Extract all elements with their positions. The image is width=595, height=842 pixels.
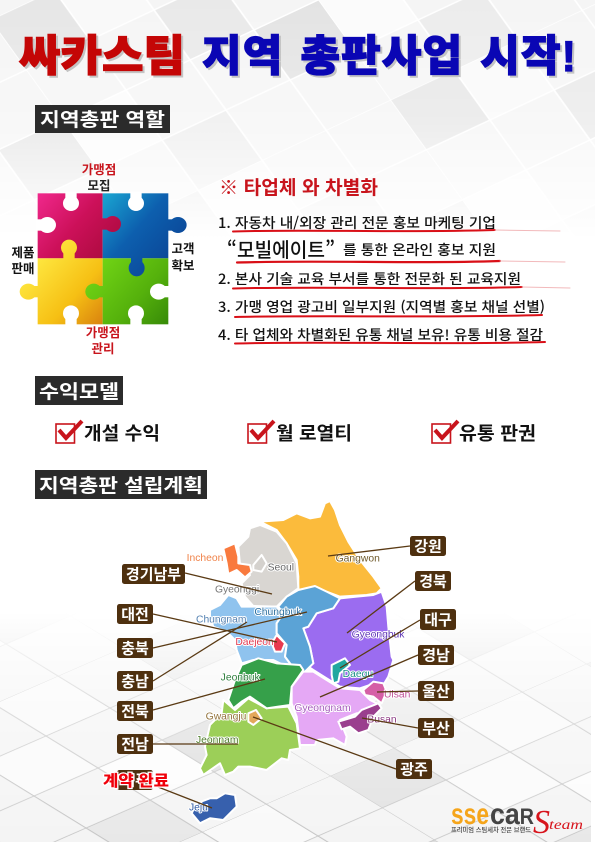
heading: 지역총판 설립계획: 지역총판 설립계획	[39, 471, 203, 498]
logo: ssecar Steam: caR	[490, 798, 534, 831]
region: Gyeongbuk	[303, 592, 393, 688]
name: Busan: Busan	[367, 715, 397, 726]
blue tabs	[167, 219, 175, 231]
logo: ssecar Steam	[451, 798, 583, 841]
name: Ulsan: Ulsan	[384, 689, 411, 700]
puzzle diagram	[20, 192, 187, 326]
puzzle label: 제품 판매: 제품	[11, 242, 35, 261]
tag: 대구: 대구	[424, 609, 452, 630]
logo: ssecar Steam: S	[533, 804, 550, 841]
name: Gyeongbuk: Gyeongbuk	[352, 630, 405, 641]
region: Gwangju	[248, 710, 262, 725]
tag: 전북: 전북	[121, 700, 149, 722]
tag: 울산: 울산	[422, 680, 450, 702]
name: Gyeongnam: Gyeongnam	[294, 703, 351, 714]
leader lines	[153, 546, 420, 808]
item 2: 2. 본사 기술 교육 부서를 통한 전문화 된 교육지원	[218, 269, 521, 289]
region: Jeonbuk	[228, 658, 303, 708]
red brush underlines	[233, 230, 570, 344]
item 1 continued	[227, 234, 496, 263]
name: Gyeonggi: Gyeonggi	[215, 584, 259, 595]
puzzle label: 가맹점 관리: 관리	[91, 338, 115, 357]
name: Jeju: Jeju	[189, 803, 208, 814]
logo: ssecar Steam: 프리미엄 스팀세차 전문 브랜드	[451, 824, 531, 834]
region: Chungbuk	[277, 586, 340, 673]
puzzle label: 가맹점 관리: 가맹점	[86, 322, 120, 341]
logo: ssecar Steam: sse	[451, 798, 489, 831]
title: 지역 총판사업 시작!	[204, 35, 578, 83]
name: Daegu: Daegu	[343, 669, 373, 680]
map of South Korea	[187, 501, 411, 823]
region: Busan	[338, 703, 382, 733]
revenue item: 유통 판권: 유통 판권	[459, 420, 536, 446]
tag: 경북: 경북	[419, 570, 447, 592]
item 4: 4. 타 업체와 차별화된 유통 채널 보유! 유통 비용 절감	[218, 325, 543, 345]
item 1: 1. 자동차 내/외장 관리 전문 홍보 마케팅 기업	[218, 213, 496, 233]
tag: 제주 with contract complete stamp: 제주	[121, 770, 149, 790]
item 1 continued: 를 통한 온라인 홍보 지원	[343, 240, 496, 260]
region: Seoul	[253, 555, 267, 572]
tag: 충남: 충남	[121, 670, 149, 692]
name: Seoul: Seoul	[268, 563, 294, 574]
item 1 continued: “모빌에이트”	[227, 234, 335, 263]
subheading: 타업체 와 차별화: ※ 타업체 와 차별화	[219, 173, 378, 200]
tag: 강원: 강원	[414, 536, 442, 556]
tag: 전남: 전남	[121, 734, 149, 754]
name: Jeonbuk: Jeonbuk	[221, 672, 261, 683]
title: 지역 총판사업 시작!	[202, 33, 576, 81]
revenue item: 개설 수익: 개설 수익	[84, 420, 160, 446]
yellow tabs	[63, 252, 75, 260]
tag: 충북: 충북	[121, 638, 149, 658]
region names	[187, 553, 411, 814]
revenue item: 월 로열티: 월 로열티	[276, 420, 352, 446]
tag: 경남: 경남	[422, 644, 450, 666]
puzzle label: 고객 확보	[171, 238, 195, 274]
region: Ulsan	[363, 682, 387, 703]
puzzle label: 고객 확보: 고객	[171, 238, 195, 257]
background: top tile pattern	[0, 0, 595, 190]
region: Daegu	[332, 658, 350, 683]
benefit list	[218, 213, 570, 345]
title: 싸카스팀	[21, 35, 187, 83]
region: Gyeonggi	[238, 525, 298, 607]
heading: 지역총판 역할: 지역총판 역할	[40, 105, 165, 132]
title	[19, 33, 578, 83]
background: bottom perspective floor	[0, 612, 591, 842]
name: Chungbuk: Chungbuk	[254, 607, 302, 618]
puzzle label: 고객 확보: 확보	[171, 255, 195, 274]
name: Gwangju: Gwangju	[206, 712, 247, 723]
white notches	[36, 192, 170, 326]
puzzle label: 가맹점 모집: 모집	[87, 175, 111, 194]
puzzle label: 제품 판매: 판매	[11, 258, 35, 277]
region: Jeonnam	[200, 698, 300, 775]
heading: 수익모델: 수익모델	[39, 377, 119, 404]
region: Daejeon	[272, 635, 285, 652]
region: Gangwon	[260, 501, 382, 597]
puzzle label: 가맹점 모집: 가맹점	[82, 159, 116, 178]
tag: 제주 with contract complete stamp: 계약 완료	[103, 769, 169, 791]
green tab	[97, 286, 105, 297]
region: Chungnam	[210, 595, 295, 670]
name: Gangwon: Gangwon	[336, 553, 380, 564]
tag: 대전: 대전	[121, 604, 149, 624]
puzzle label: 가맹점 모집	[82, 159, 116, 194]
tag: 경기남부: 경기남부	[126, 564, 181, 584]
name: Incheon: Incheon	[187, 553, 224, 564]
puzzle label: 제품 판매	[11, 242, 35, 277]
tag: 부산: 부산	[422, 718, 450, 738]
puzzle label: 가맹점 관리	[86, 322, 120, 357]
title: 싸카스팀	[19, 33, 185, 81]
region: Gyeongnam	[292, 672, 380, 745]
tag: 광주: 광주	[400, 758, 428, 780]
magenta tab	[102, 218, 110, 230]
item 3: 3. 가맹 영업 광고비 일부지원 (지역별 홍보 채널 선별)	[218, 297, 545, 317]
name: Chungnam: Chungnam	[196, 615, 247, 626]
region: Incheon	[223, 543, 252, 577]
logo: ssecar Steam: team	[549, 818, 583, 833]
region: Jeju	[192, 793, 237, 823]
name: Daejeon: Daejeon	[235, 637, 274, 648]
name: Jeonnam: Jeonnam	[196, 735, 238, 746]
